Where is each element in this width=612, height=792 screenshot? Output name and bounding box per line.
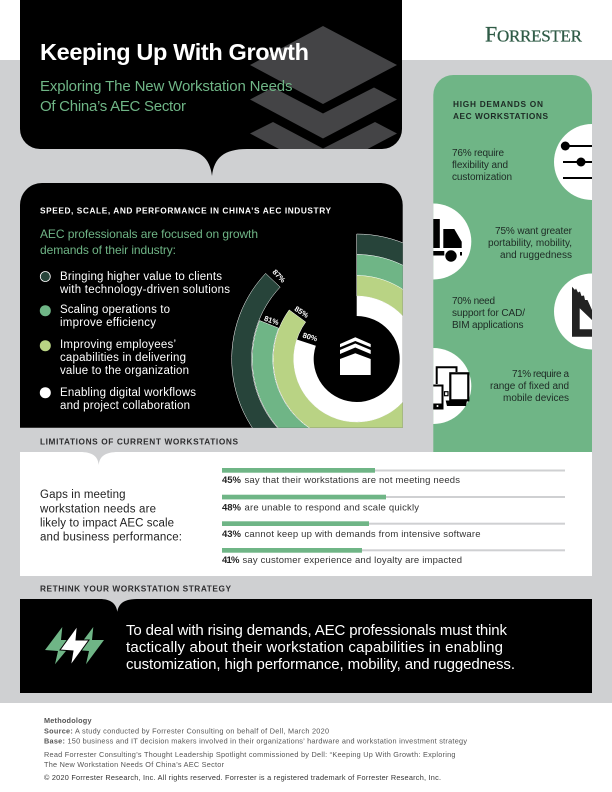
panel: rethink your workstation strategy — [20, 599, 592, 693]
heading: rethink: RETHINK YOUR WORKSTATION STRATEGY — [40, 584, 231, 594]
stat: 75%: and ruggedness — [500, 250, 572, 261]
stat: 71%: range of fixed and — [490, 381, 569, 392]
list item: improving capabilities: Improving employees’ — [60, 339, 176, 351]
list item: higher value: with technology-driven solutions — [59, 284, 230, 296]
list item: scaling operations — [40, 304, 170, 329]
list item: scaling operations: improve efficiency — [60, 317, 156, 329]
panel: speed, scale and performance — [20, 183, 403, 428]
label: 85%: 85% — [293, 304, 311, 320]
stat: 76%: flexibility and — [452, 160, 508, 171]
text: gaps statement: likely to impact AEC scale — [40, 517, 174, 529]
bar: 43% — [222, 521, 565, 540]
stat: 76%: 76% require — [452, 148, 504, 159]
list item: digital workflows: Enabling digital workflows — [60, 387, 196, 399]
footer: methodology and credits: Source: A study conducted by Forrester Consulting on behalf of Dell, March 2020 — [44, 726, 329, 736]
callout text: customization, high performance, mobility, and ruggedness. — [126, 656, 515, 673]
bar: 41%: 41% — [222, 555, 240, 566]
bar: 43%: 43% — [222, 529, 242, 540]
panel heading: AEC WORKSTATIONS — [453, 111, 548, 121]
subtitle: Of China’s AEC Sector — [40, 98, 186, 115]
stat: 71% — [490, 369, 569, 404]
list item: improving capabilities: value to the organization — [60, 365, 189, 377]
icon: truck — [433, 204, 471, 280]
intro text: AEC professionals are focused on growth — [40, 227, 258, 241]
footer: methodology and credits: © 2020 Forrester Research, Inc. All rights reserved. Forrester is a registered trademark of Forrester Research, Inc. — [44, 773, 441, 782]
stat: 70%: support for CAD/ — [452, 308, 525, 319]
footer: methodology and credits: Methodology — [44, 716, 92, 725]
footer: methodology and credits: Base: 150 business and IT decision makers involved in their organizations’ hardware and workstation investment strategy — [44, 736, 467, 746]
footer: methodology and credits — [44, 716, 467, 782]
icon: fixed and mobile devices — [433, 348, 471, 424]
chart: radial percentage rings — [231, 234, 403, 428]
stat: 76%: customization — [452, 172, 512, 183]
logo: Forrester: FORRESTER — [485, 22, 583, 46]
label: 87%: 87% — [271, 267, 288, 285]
icon: stacked layers — [250, 26, 397, 149]
footer: methodology and credits: The New Workstation Needs Of China’s AEC Sector — [44, 760, 225, 769]
callout text — [126, 622, 515, 673]
bar: 41% — [222, 548, 565, 566]
list item: higher value — [40, 271, 230, 296]
stat: 70%: 70% need — [452, 296, 495, 307]
stat: 75%: portability, mobility, — [488, 238, 572, 249]
callout text: To deal with rising demands, AEC professionals must think — [126, 622, 508, 639]
text: gaps statement: Gaps in meeting — [40, 489, 126, 501]
list item: improving capabilities — [40, 339, 189, 377]
bar: 45%: say that their workstations are not meeting needs — [244, 475, 460, 486]
callout text: tactically about their workstation capabilities in enabling — [126, 639, 503, 656]
stat: 75% — [488, 226, 573, 261]
stat: 76% — [452, 148, 512, 183]
bar: 43%: cannot keep up with demands from intensive software — [244, 529, 480, 540]
text: gaps statement: and business performance: — [40, 531, 182, 543]
subtitle: Exploring The New Workstation Needs — [40, 78, 292, 95]
list item: scaling operations: Scaling operations to — [60, 304, 170, 316]
panel heading: SPEED, SCALE, AND PERFORMANCE IN CHINA’S AEC INDUSTRY — [40, 206, 331, 216]
stat: 71%: mobile devices — [503, 393, 569, 404]
list item: improving capabilities: capabilities in delivering — [60, 352, 186, 364]
stat: 70% — [452, 296, 525, 331]
text: gaps statement: workstation needs are — [39, 503, 156, 515]
panel heading — [453, 99, 548, 121]
list item: higher value: Bringing higher value to clients — [60, 271, 222, 283]
panel: title header — [20, 0, 402, 176]
bar: 45% — [222, 468, 565, 486]
title: Keeping Up With Growth — [40, 39, 309, 65]
list item: digital workflows: and project collaboration — [60, 400, 190, 412]
label: 80%: 80% — [302, 331, 319, 343]
bar: 48%: are unable to respond and scale quickly — [244, 502, 419, 514]
label: 81%: 81% — [263, 314, 280, 327]
stat: 75%: 75% want greater — [495, 226, 573, 237]
icon: lightning bolts — [45, 626, 104, 666]
text: gaps statement — [39, 489, 182, 543]
bar: 48% — [222, 495, 565, 514]
icon: house with chevrons — [340, 337, 371, 375]
stat: 70%: BIM applications — [452, 320, 524, 331]
panel: limitations of current workstations — [20, 452, 592, 576]
bar: 45%: 45% — [222, 475, 242, 486]
subtitle — [40, 78, 292, 115]
icon: set square — [554, 274, 592, 350]
bar: 41%: say customer experience and loyalty are impacted — [242, 555, 462, 566]
heading: limitations: LIMITATIONS OF CURRENT WORKSTATIONS — [40, 437, 238, 447]
footer: methodology and credits: Read Forrester Consulting’s Thought Leadership Spotlight commissioned by Dell: “Keeping Up With Growth: Exploring — [44, 750, 455, 759]
intro text: demands of their industry: — [40, 243, 176, 257]
intro text — [40, 227, 258, 257]
icon: sliders — [554, 124, 592, 200]
panel heading: HIGH DEMANDS ON — [453, 99, 543, 109]
bar: 48%: 48% — [222, 502, 242, 514]
list item: digital workflows — [40, 387, 196, 412]
stat: 71%: 71% require a — [512, 369, 569, 380]
panel: high demands on AEC workstations — [433, 75, 592, 452]
